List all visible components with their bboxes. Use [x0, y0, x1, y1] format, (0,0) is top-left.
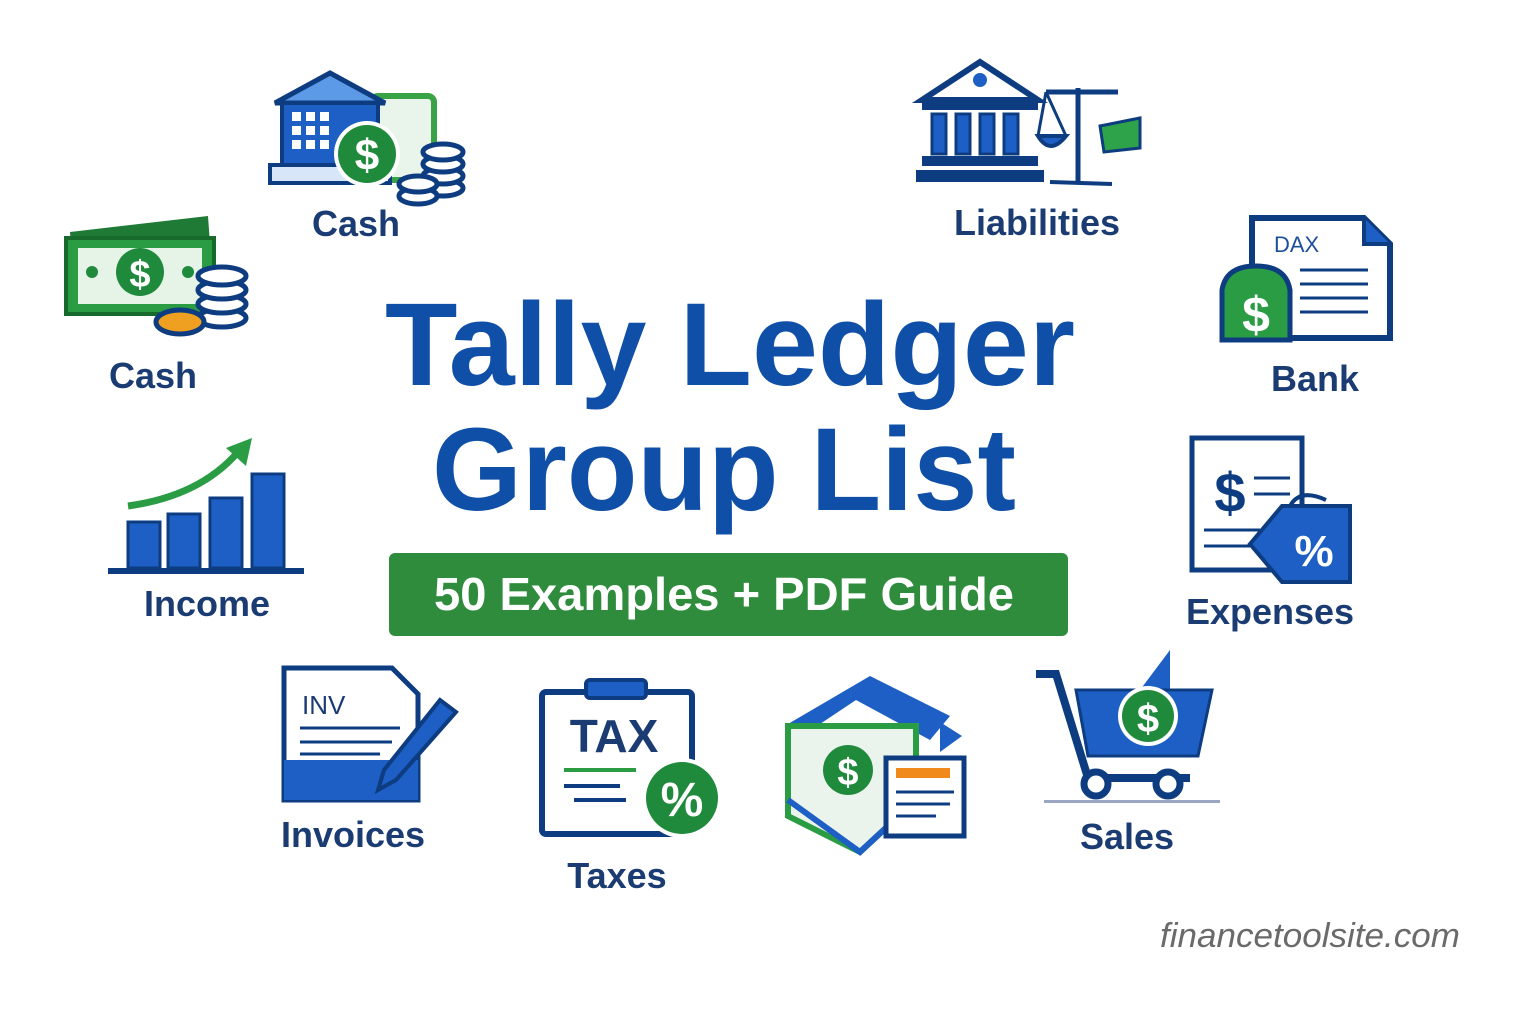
icon: sales cart [1036, 650, 1220, 803]
icon: cash money bills (left) [66, 216, 246, 334]
watermark: financetoolsite.com: financetoolsite.com [1160, 917, 1460, 955]
label: Liabilities: Liabilities [954, 202, 1120, 243]
label: Invoices: Invoices [281, 814, 425, 855]
icon: tax clipboard [542, 680, 722, 838]
title: Tally Ledger [385, 279, 1075, 411]
banner: 50 Examples + PDF Guide: 50 Examples + PDF Guide [434, 568, 1014, 620]
icon: payment shield with receipt [788, 676, 964, 852]
title: Group List [432, 404, 1016, 536]
label: Cash (top): Cash [312, 203, 400, 244]
label: Cash (left): Cash [109, 355, 197, 396]
icon: invoice with pencil [284, 668, 456, 800]
icon: cash bank with coins (top) [270, 73, 463, 204]
icon: expenses receipt with tag [1192, 438, 1350, 582]
label: Taxes: Taxes [567, 855, 667, 896]
icon: invoice with pencil: INV [302, 690, 346, 720]
icon: cash money bills (left): $ [129, 254, 151, 296]
icon: cash bank with coins (top): $ [355, 131, 379, 180]
icon: bank document: DAX [1274, 232, 1320, 257]
title [385, 279, 1075, 536]
icon: payment shield with receipt: $ [837, 752, 859, 794]
icon: bank document [1222, 218, 1390, 343]
icon: tax clipboard: TAX [570, 710, 659, 762]
label: Bank: Bank [1271, 358, 1360, 399]
label: Expenses: Expenses [1186, 591, 1354, 632]
icon: expenses receipt with tag: $ [1214, 461, 1246, 524]
icon: expenses receipt with tag: % [1294, 527, 1334, 576]
icon: sales cart: $ [1137, 697, 1159, 741]
banner: 50 Examples + PDF Guide [389, 553, 1068, 636]
label: Income: Income [144, 583, 270, 624]
icon: liabilities bank and scale [916, 62, 1140, 184]
icon: tax clipboard: % [661, 774, 703, 827]
icon: bank document: $ [1242, 287, 1270, 343]
label: Sales: Sales [1080, 816, 1174, 857]
icon: income bar chart [108, 438, 304, 574]
